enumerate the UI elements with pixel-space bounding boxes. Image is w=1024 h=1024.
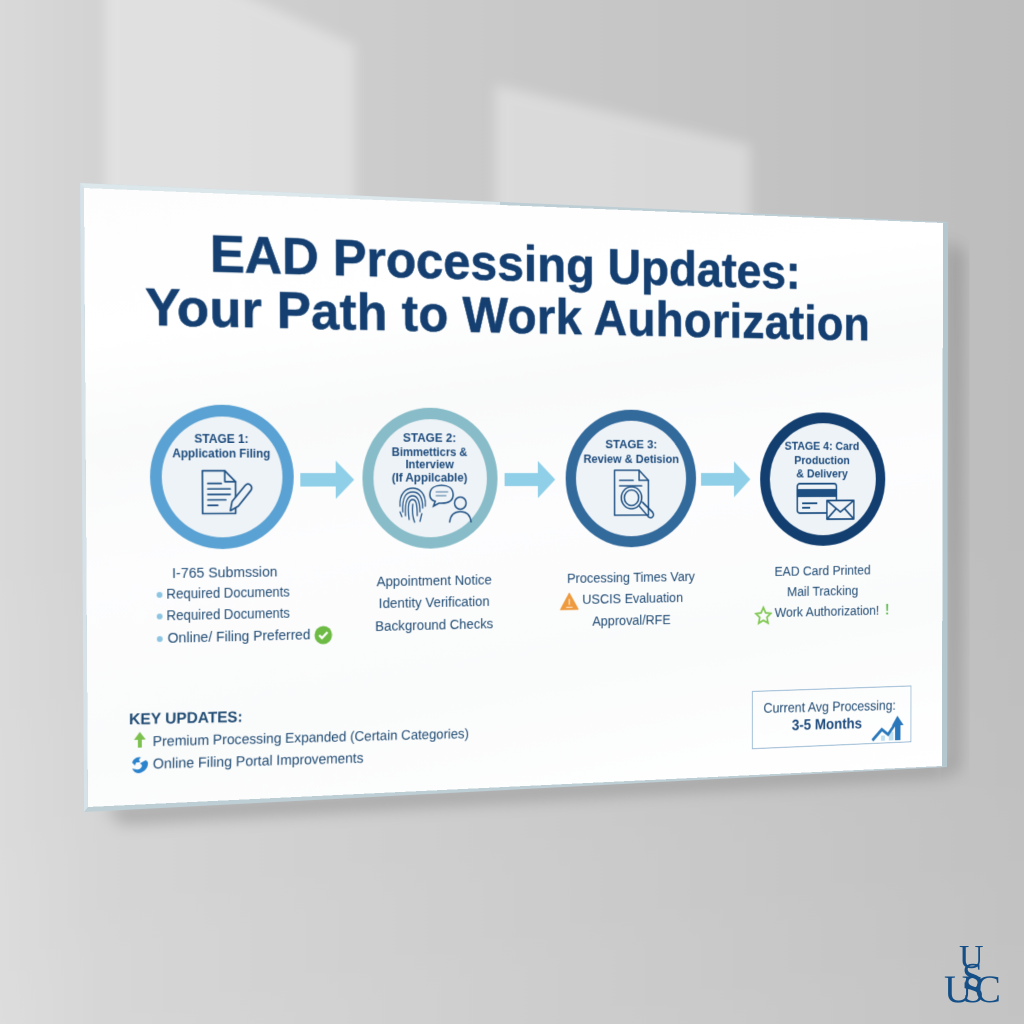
stage 3 heading bbox=[583, 437, 679, 466]
panel frame bbox=[80, 183, 948, 812]
stage 3 list bbox=[560, 570, 696, 630]
stage 4: card production and delivery bbox=[754, 412, 889, 626]
stage 2 heading: STAGE 2: bbox=[403, 430, 456, 445]
stage 2 heading bbox=[392, 430, 468, 485]
icon: card and envelope bbox=[786, 482, 860, 522]
stage 1 list: I-765 Submssion bbox=[172, 565, 277, 582]
icon: fingerprint, speech bubble, person bbox=[398, 484, 472, 524]
stage 3 heading: Review & Detision bbox=[583, 452, 679, 466]
stage 3 list: Processing Times Vary bbox=[567, 570, 695, 587]
key updates bbox=[129, 709, 469, 774]
stage 2: biometrics and interview bbox=[362, 408, 498, 635]
stage 1 list: Required Documents bbox=[166, 606, 290, 623]
stage 1 list bbox=[156, 442, 333, 647]
stage 1 list: Required Documents bbox=[166, 585, 290, 602]
panel: EAD processing board bbox=[84, 188, 943, 807]
icon: warning triangle bbox=[560, 592, 579, 611]
stage 4 list: Mail Tracking bbox=[787, 583, 858, 600]
callout value: 3-5 Months bbox=[792, 715, 862, 734]
stage 4 list: Work Authorization! bbox=[775, 603, 879, 621]
stage 4 heading: Production bbox=[794, 453, 850, 467]
stage 2 heading: Bimmetticrs & bbox=[392, 445, 467, 459]
arrow 3 bbox=[566, 461, 750, 498]
stage 2 list bbox=[375, 484, 493, 635]
logo: USC monogram: U bbox=[959, 939, 984, 976]
icon: green star bbox=[754, 606, 772, 626]
stage 2 list: Appointment Notice bbox=[376, 573, 492, 590]
stage 1 heading: STAGE 1: bbox=[194, 432, 249, 446]
stage 2 list: Background Checks bbox=[375, 617, 493, 635]
stage 2 heading: (If Appilcable) bbox=[392, 470, 467, 484]
stage 2 list: Identity Verification bbox=[379, 595, 490, 612]
stage 4 heading: & Delivery bbox=[796, 467, 848, 480]
icon: document with magnifier bbox=[584, 445, 678, 519]
stage 1 heading: Application Filing bbox=[172, 447, 270, 460]
logo: USC monogram: S bbox=[962, 956, 983, 998]
title bbox=[144, 224, 870, 351]
icon: green exclamation: ! bbox=[885, 603, 889, 618]
update 2: online filing portal: Online Filing Portal Improvements bbox=[153, 751, 363, 773]
logo: USC monogram bbox=[944, 939, 999, 1011]
update 1: premium processing: Premium Processing Expanded (Certain Categories) bbox=[153, 727, 469, 750]
stage 2 ring bbox=[362, 407, 498, 549]
stage 1 ring bbox=[150, 404, 294, 550]
stage 1 heading bbox=[172, 432, 270, 461]
stage 3 list: Approval/RFE bbox=[592, 613, 671, 630]
callout: current average processing bbox=[752, 685, 911, 749]
logo: USC monogram: USC bbox=[944, 968, 991, 1011]
icon: green check bbox=[172, 442, 333, 645]
callout label: Current Avg Processing: bbox=[763, 698, 896, 716]
stage 1 list: Online/ Filing Preferred bbox=[168, 628, 310, 647]
stage 2 heading: Interview bbox=[405, 458, 454, 471]
stage 4 list: EAD Card Printed bbox=[774, 563, 871, 580]
title: EAD Processing Updates: bbox=[210, 224, 801, 300]
icon: blue refresh bbox=[132, 756, 149, 774]
arrow 2 bbox=[485, 460, 556, 498]
arrow 1 bbox=[172, 442, 354, 500]
stage 4 ring bbox=[760, 412, 885, 547]
stage 3 heading: STAGE 3: bbox=[605, 437, 657, 451]
stage 4 heading bbox=[784, 439, 859, 480]
key updates heading: KEY UPDATES: bbox=[129, 709, 243, 728]
icon: document and pencil bbox=[172, 442, 272, 516]
stage 4 list bbox=[754, 563, 889, 626]
stage 3 ring bbox=[566, 409, 696, 548]
icon: rising chart arrow bbox=[872, 716, 904, 742]
icon: green up arrow bbox=[134, 732, 146, 748]
stage 3: review and decision bbox=[560, 410, 696, 630]
stage 3 list: USCIS Evaluation bbox=[582, 591, 683, 608]
stage 4 heading: STAGE 4: Card bbox=[785, 439, 859, 453]
stage 1: application filing bbox=[150, 404, 333, 647]
title: Your Path to Work Auhorization bbox=[145, 277, 870, 351]
